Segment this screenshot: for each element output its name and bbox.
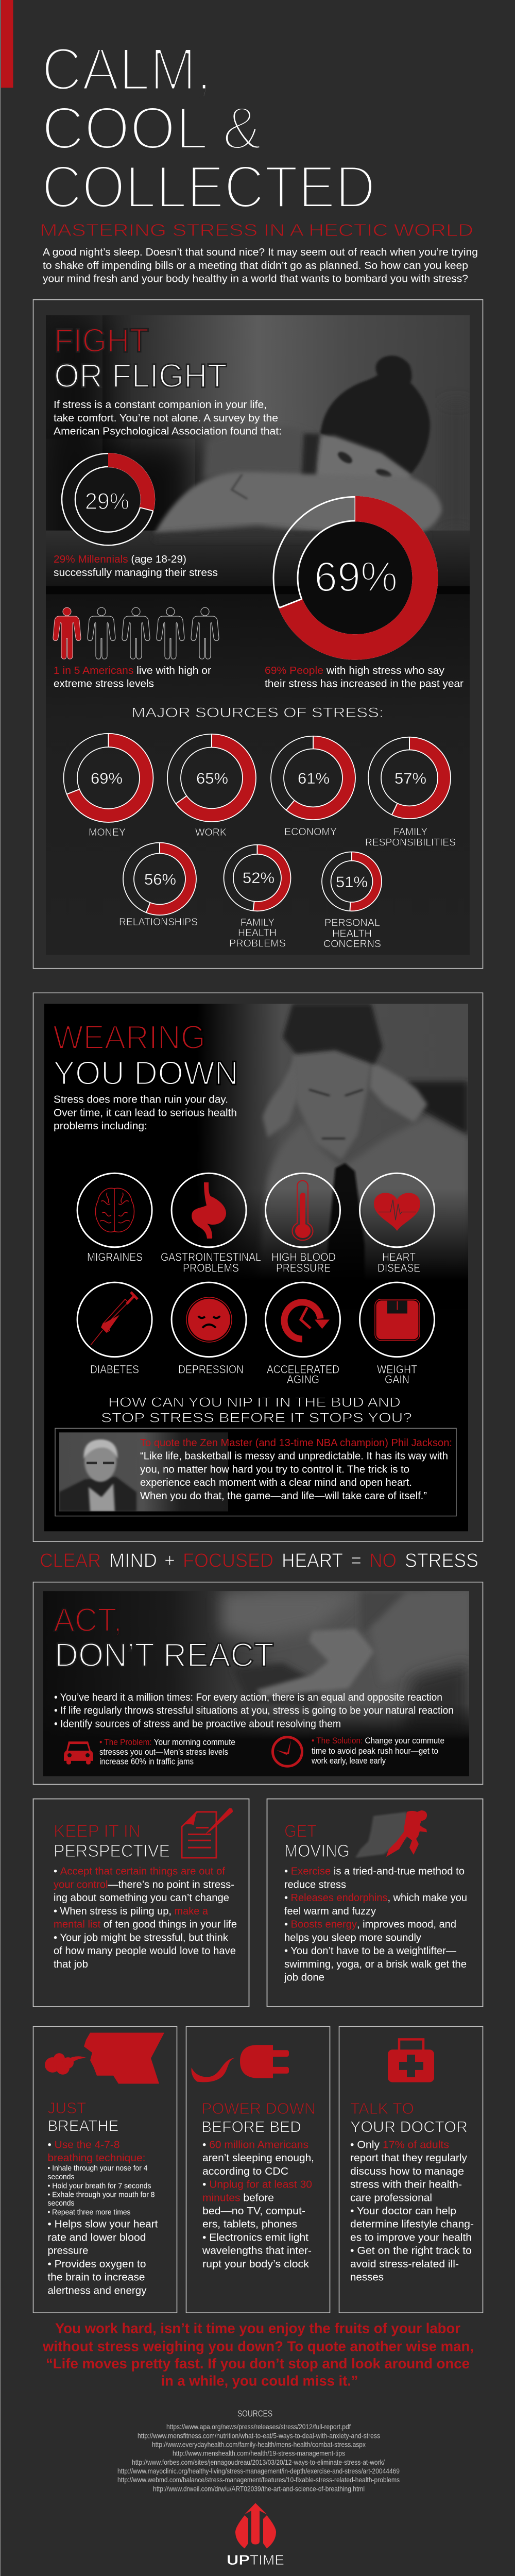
stat: 1 in 5 americans: 1 in 5 Americans live with high or	[54, 665, 211, 676]
sources list: http://www.menshealth.com/health/19-stress-management-tips	[173, 2449, 345, 2457]
equation: clear mind focused heart no stress: FOCUSED	[183, 1550, 273, 1572]
text: intro	[54, 1094, 237, 1132]
donut: work: 65%	[196, 770, 228, 787]
bullets: act don't react: • If life regularly throws stressful situations at you, stress is going to be your natural reaction	[54, 1705, 454, 1717]
text: survey intro: take comfort. You’re not alone. A survey by the	[54, 413, 278, 424]
bullets: act don't react: • Identify sources of stress and be proactive about resolving them	[54, 1719, 341, 1730]
icon: accelerated aging clock	[266, 1282, 340, 1386]
donut: personal health concerns: HEALTH	[332, 927, 372, 939]
bullets: doctor tips: stress with their health-	[350, 2179, 462, 2191]
bullets: sleep tips: • 60 million Americans	[202, 2139, 308, 2150]
equation: clear mind focused heart no stress	[40, 1550, 478, 1572]
bullets: sleep tips: rupt your body’s clock	[202, 2259, 310, 2270]
icon: diabetes syringe: DIABETES	[90, 1363, 139, 1376]
icon: clock	[273, 1737, 302, 1766]
text: survey intro	[54, 399, 282, 437]
equation: clear mind focused heart no stress: +	[164, 1550, 175, 1572]
bullets: breathing tips: the brain to increase	[47, 2272, 145, 2283]
heading: act, don't react: ACT,	[54, 1601, 122, 1638]
bullets: moving tips: feel warm and fuzzy	[284, 1906, 376, 1917]
stat: 1 in 5 americans	[54, 665, 211, 690]
bullets: act don't react: • You’ve heard it a million times: For every action, there is an equal and opposite reaction	[54, 1692, 442, 1703]
heading: how can you nip it: HOW CAN YOU NIP IT IN THE BUD AND	[108, 1395, 401, 1410]
bullets: sleep tips: aren’t sleeping enough,	[202, 2153, 314, 2164]
heading: keep it in perspective	[54, 1821, 170, 1861]
icon: weight gain scale: GAIN	[385, 1373, 409, 1386]
bullets: doctor tips: • Get on the right track to	[350, 2245, 472, 2257]
donut: family responsibilities: 57%	[394, 770, 426, 787]
icon: high blood pressure thermometer: HIGH BLOOD	[271, 1251, 336, 1263]
donut: money: 69%	[91, 770, 123, 787]
donut: relationships: RELATIONSHIPS	[119, 916, 198, 928]
panel: just breathe	[33, 2026, 177, 2313]
heading: keep it in perspective: PERSPECTIVE	[54, 1841, 170, 1861]
panel: get moving	[267, 1799, 483, 2007]
heading: talk to your doctor: TALK TO	[350, 2099, 414, 2117]
callout: phil jackson quote	[55, 1428, 456, 1516]
bullets: doctor tips: care professional	[350, 2192, 432, 2204]
bullets: perspective tips	[54, 1866, 237, 1970]
panel: wearing you down	[33, 993, 483, 1541]
equation: clear mind focused heart no stress: NO	[369, 1550, 397, 1572]
equation: clear mind focused heart no stress: CLEAR	[40, 1550, 101, 1572]
text: survey intro: American Psychological Association found that:	[54, 426, 282, 437]
title	[42, 36, 375, 221]
icon: high blood pressure thermometer	[266, 1173, 340, 1274]
heading: power down before bed: POWER DOWN	[201, 2099, 316, 2117]
text: the problem: increase 60% in traffic jams	[99, 1757, 194, 1767]
heading: just breathe: BREATHE	[47, 2117, 119, 2135]
title: COLLECTED	[42, 153, 375, 221]
text: the solution: time to avoid peak rush hour—get to	[312, 1747, 438, 1756]
panel: act, don't react	[33, 1582, 483, 1784]
stat: millennials: successfully managing their stress	[54, 567, 218, 579]
icon: plug	[191, 2045, 289, 2082]
bullets: perspective tips: ing about something you can’t change	[54, 1892, 229, 1904]
sources list: http://www.everydayhealth.com/family-health/mens-health/combat-stress.aspx	[152, 2441, 366, 2448]
icon: weight gain scale: WEIGHT	[377, 1363, 417, 1376]
text: the solution: work early, leave early	[311, 1756, 386, 1766]
bullets: doctor tips: report that they regularly	[350, 2153, 468, 2164]
photo: stressed woman	[46, 315, 470, 602]
stat: millennials: 29% Millennials (age 18-29)	[54, 554, 186, 565]
stat: 1 in 5 americans: extreme stress levels	[54, 679, 154, 690]
bullets: moving tips: job done	[284, 1972, 324, 1984]
heading: get moving: MOVING	[284, 1841, 350, 1861]
bullets: doctor tips: nesses	[350, 2272, 384, 2283]
bullets: breathing tips: seconds	[47, 2173, 75, 2181]
icon: head breathing	[45, 2033, 164, 2084]
bullets: moving tips: reduce stress	[284, 1879, 346, 1890]
donut: family health problems: 52%	[243, 870, 274, 887]
bullets: breathing tips: alertness and energy	[47, 2285, 147, 2296]
donut: economy	[271, 736, 355, 838]
callout: phil jackson quote: experience each moment with a clear mind and open heart.	[140, 1477, 412, 1488]
heading: fight or flight	[54, 321, 227, 394]
bullets: sleep tips: according to CDC	[202, 2166, 288, 2177]
icons: people 1 in 5	[53, 607, 219, 659]
donut: personal health concerns: 51%	[336, 874, 368, 891]
bullets: breathing tips: • Use the 4-7-8	[47, 2139, 119, 2150]
equation: clear mind focused heart no stress: HEART	[282, 1550, 343, 1572]
bullets: moving tips: • Boosts energy, improves mood, and	[284, 1919, 456, 1930]
donut: personal health concerns: CONCERNS	[323, 938, 381, 950]
icon: weight gain scale	[359, 1282, 435, 1386]
logo: uptime: TIME	[250, 2552, 284, 2568]
bullets: breathing tips: seconds	[47, 2199, 75, 2208]
logo: uptime: UP	[227, 2552, 250, 2568]
heading: keep it in perspective: KEEP IT IN	[54, 1821, 141, 1841]
intro text: your mind fresh and your body healthy in a world that wants to bombard you with stress?	[43, 274, 468, 284]
sources heading: SOURCES	[237, 2409, 272, 2419]
bullets: breathing tips: pressure	[47, 2245, 89, 2257]
bullets: perspective tips: mental list of ten good things in your life	[54, 1919, 237, 1930]
donut: family responsibilities	[365, 737, 456, 849]
bullets: breathing tips: • Inhale through your nose for 4	[47, 2164, 147, 2173]
equation: clear mind focused heart no stress: STRESS	[405, 1550, 478, 1572]
bullets: doctor tips: avoid stress-related ill-	[350, 2259, 459, 2270]
icon: car	[64, 1741, 93, 1765]
heading: get moving	[284, 1821, 350, 1861]
heading: how can you nip it	[101, 1395, 412, 1425]
callout: phil jackson quote: “Like life, basketball is messy and unpredictable. It has its way with	[140, 1451, 448, 1462]
heading: just breathe: JUST	[47, 2099, 87, 2117]
heading: act, don't react: DON’T REACT	[55, 1636, 274, 1674]
sources list: http://www.webmd.com/balance/stress-management/features/10-fixable-stress-related-health-problems	[117, 2476, 400, 2484]
text: the problem: • The Problem: Your morning commute	[99, 1738, 235, 1747]
bullets: doctor tips: discuss how to manage	[350, 2166, 464, 2177]
red corner bar	[1, 0, 13, 88]
person: highlighted	[53, 607, 81, 659]
bullets: perspective tips: • Accept that certain things are out of	[54, 1866, 225, 1877]
bullets: breathing tips: • Provides oxygen to	[47, 2259, 146, 2270]
intro text	[43, 247, 478, 284]
heading: act, don't react	[54, 1601, 274, 1674]
closing message: “Life moves pretty fast. If you don’t stop and look around once	[46, 2355, 470, 2371]
bullets: perspective tips: of how many people would love to have	[54, 1945, 236, 1957]
icon: gastrointestinal stomach	[161, 1173, 261, 1274]
bullets: sleep tips: ers, tablets, phones	[202, 2219, 297, 2230]
photo: man holding head	[206, 1004, 468, 1310]
icon: high blood pressure thermometer: PRESSURE	[276, 1261, 331, 1274]
panel: fight or flight	[33, 300, 483, 969]
bullets: perspective tips: • When stress is piling up, make a	[54, 1906, 209, 1917]
donut: family health problems	[224, 845, 290, 950]
bullets: perspective tips: your control—there’s no point in stress-	[54, 1879, 234, 1890]
icon: migraines brain: MIGRAINES	[87, 1251, 143, 1263]
closing message: without stress weighing you down? To quote another wise man,	[42, 2338, 474, 2354]
donut: work	[167, 734, 256, 838]
heading: talk to your doctor	[350, 2099, 468, 2136]
text: intro: Over time, it can lead to serious health	[54, 1107, 237, 1118]
stat: 69 percent people: their stress has increased in the past year	[265, 679, 464, 690]
heading: just breathe	[47, 2099, 119, 2135]
bullets: sleep tips: minutes before	[202, 2192, 274, 2204]
donut: personal health concerns: PERSONAL	[324, 917, 380, 928]
icon: depression sad face: DEPRESSION	[178, 1363, 244, 1376]
equation: clear mind focused heart no stress: MIND	[109, 1550, 157, 1572]
donut: money	[64, 734, 153, 838]
bullets: doctor tips	[350, 2139, 474, 2283]
sources list: http://www.mensfitness.com/nutrition/what-to-eat/5-ways-to-deal-with-anxiety-and-stress	[138, 2432, 380, 2440]
stat: 69 percent people: 69% People with high stress who say	[265, 665, 445, 676]
sources list: http://www.mayoclinic.org/healthy-living/stress-management/in-depth/exercise-and-stress/art-20044469	[117, 2467, 400, 2475]
donut: personal health concerns	[322, 852, 382, 950]
donut: relationships: 56%	[144, 871, 176, 888]
text: intro: Stress does more than ruin your day.	[54, 1094, 228, 1106]
icon: heart disease	[359, 1173, 435, 1274]
text: the solution	[311, 1736, 444, 1766]
donut: money: MONEY	[89, 826, 126, 838]
heading: wearing you down	[53, 1019, 238, 1092]
bullets: breathing tips: • Repeat three more times	[47, 2209, 131, 2216]
text: the problem: stresses you out—Men’s stress levels	[99, 1748, 228, 1757]
closing message	[42, 2320, 474, 2389]
photo: meditating hand	[43, 1591, 469, 1776]
icon: gastrointestinal stomach: PROBLEMS	[183, 1261, 239, 1274]
text: the solution: • The Solution: Change your commute	[312, 1736, 444, 1745]
donut: family health problems: HEALTH	[238, 927, 277, 939]
donut: 69 percent: 69%	[314, 554, 398, 600]
donut: relationships	[119, 843, 198, 928]
intro text: A good night’s sleep. Doesn’t that sound nice? It may seem out of reach when you’re trying	[43, 247, 478, 258]
sources list: https://www.apa.org/news/press/releases/stress/2012/full-report.pdf	[166, 2423, 351, 2431]
bullets: doctor tips: determine lifestyle chang-	[350, 2219, 474, 2230]
text: the problem	[99, 1738, 235, 1767]
icon: depression sad face	[171, 1282, 246, 1376]
bullets: sleep tips	[202, 2139, 314, 2270]
bullets: doctor tips: • Your doctor can help	[350, 2206, 456, 2217]
icon: paper and pen	[181, 1808, 233, 1858]
icon: accelerated aging clock: AGING	[287, 1373, 319, 1386]
closing message: You work hard, isn’t it time you enjoy the fruits of your labor	[55, 2320, 460, 2336]
bullets: doctor tips: • Only 17% of adults	[350, 2139, 449, 2150]
bullets: moving tips: • Releases endorphins, which make you	[284, 1892, 467, 1904]
bullets: moving tips: helps you sleep more soundly	[284, 1932, 422, 1943]
donut: 29 percent	[62, 453, 154, 545]
icon: heart disease: DISEASE	[377, 1261, 420, 1274]
bullets: doctor tips: es to improve your health	[350, 2232, 472, 2243]
equation: clear mind focused heart no stress: =	[351, 1550, 362, 1572]
sources list: http://www.forbes.com/sites/jennagoudreau/2013/03/20/12-ways-to-eliminate-stress-at-work/	[132, 2459, 385, 2466]
callout: phil jackson quote: you, no matter how hard you try to control it. The trick is to	[140, 1464, 409, 1475]
bullets: moving tips	[284, 1866, 467, 1984]
donut: 69 percent	[273, 497, 437, 659]
logo: uptime	[227, 2503, 284, 2568]
text: survey intro: If stress is a constant companion in your life,	[54, 399, 267, 411]
bullets: perspective tips: • Your job might be stressful, but think	[54, 1932, 229, 1943]
icon: heart disease: HEART	[382, 1251, 416, 1263]
heading: wearing you down: WEARING	[53, 1019, 205, 1056]
donut: economy: ECONOMY	[284, 826, 337, 838]
bullets: sleep tips: wavelengths that inter-	[202, 2245, 312, 2257]
heading: fight or flight: OR FLIGHT	[54, 357, 227, 394]
bullets: breathing tips	[47, 2139, 158, 2296]
icon: diabetes syringe	[77, 1282, 152, 1376]
text: intro: problems including:	[54, 1121, 147, 1132]
heading: get moving: GET	[284, 1821, 317, 1841]
bullets: breathing tips: rate and lower blood	[47, 2232, 146, 2243]
subtitle: MASTERING STRESS IN A HECTIC WORLD	[40, 221, 473, 240]
bullets: breathing tips: • Hold your breath for 7 seconds	[47, 2182, 151, 2191]
bullets: breathing tips: breathing technique:	[47, 2153, 146, 2164]
heading: talk to your doctor: YOUR DOCTOR	[350, 2118, 468, 2136]
heading: fight or flight: FIGHT	[54, 321, 149, 359]
stat: 69 percent people	[265, 665, 464, 690]
title: COOL &	[42, 95, 262, 162]
bullets: perspective tips: that job	[54, 1959, 88, 1970]
icon: gastrointestinal stomach: GASTROINTESTINAL	[161, 1251, 261, 1263]
donut: 29 percent: 29%	[85, 488, 129, 514]
bullets: moving tips: swimming, yoga, or a brisk walk get the	[284, 1959, 467, 1970]
heading: power down before bed	[201, 2099, 316, 2136]
icon: migraines brain	[77, 1173, 152, 1263]
intro text: to shake off impending bills or a meeting that didn’t go as planned. So how can you keep	[43, 260, 468, 272]
bullets: act don't react	[54, 1692, 454, 1730]
heading: wearing you down: YOU DOWN	[53, 1054, 238, 1092]
icon: accelerated aging clock: ACCELERATED	[267, 1363, 339, 1376]
bullets: breathing tips: • Exhale through your mouth for 8	[47, 2191, 155, 2199]
callout: phil jackson quote: To quote the Zen Master (and 13-time NBA champion) Phil Jackson:	[140, 1437, 452, 1449]
donut: work: WORK	[195, 826, 227, 838]
heading: power down before bed: BEFORE BED	[201, 2118, 301, 2136]
donut: family responsibilities: FAMILY	[393, 826, 427, 838]
closing message: in a while, you could miss it.”	[161, 2373, 358, 2389]
stat: millennials	[54, 554, 218, 579]
donut: family responsibilities: RESPONSIBILITIES	[365, 837, 456, 849]
icon: medical kit	[388, 2039, 434, 2082]
bullets: sleep tips: • Unplug for at least 30	[202, 2179, 312, 2191]
panel: power down before bed	[186, 2026, 330, 2313]
bullets: moving tips: • You don’t have to be a weightlifter—	[284, 1945, 457, 1957]
callout: phil jackson quote: When you do that, the game—and life—will take care of itself.”	[140, 1490, 427, 1502]
heading: major sources of stress: MAJOR SOURCES OF STRESS:	[131, 705, 384, 720]
donut: family health problems: PROBLEMS	[229, 938, 286, 950]
donut: economy: 61%	[298, 770, 330, 787]
title: CALM,	[42, 36, 212, 103]
bullets: sleep tips: bed—no TV, comput-	[202, 2206, 305, 2217]
heading: how can you nip it: STOP STRESS BEFORE IT STOPS YOU?	[101, 1410, 412, 1425]
photo: phil jackson	[59, 1432, 228, 1512]
bullets: breathing tips: • Helps slow your heart	[47, 2219, 158, 2230]
bullets: moving tips: • Exercise is a tried-and-true method to	[284, 1866, 465, 1877]
icon: running figure	[355, 1810, 427, 1858]
donut: family health problems: FAMILY	[241, 917, 274, 928]
panel: keep it in perspective	[33, 1799, 249, 2007]
sources list	[117, 2423, 400, 2493]
panel: talk to your doctor	[339, 2026, 483, 2313]
bullets: sleep tips: • Electronics emit light	[202, 2232, 308, 2243]
sources list: http://www.drweil.com/drw/u/ART02039/the-art-and-science-of-breathing.html	[153, 2485, 365, 2493]
